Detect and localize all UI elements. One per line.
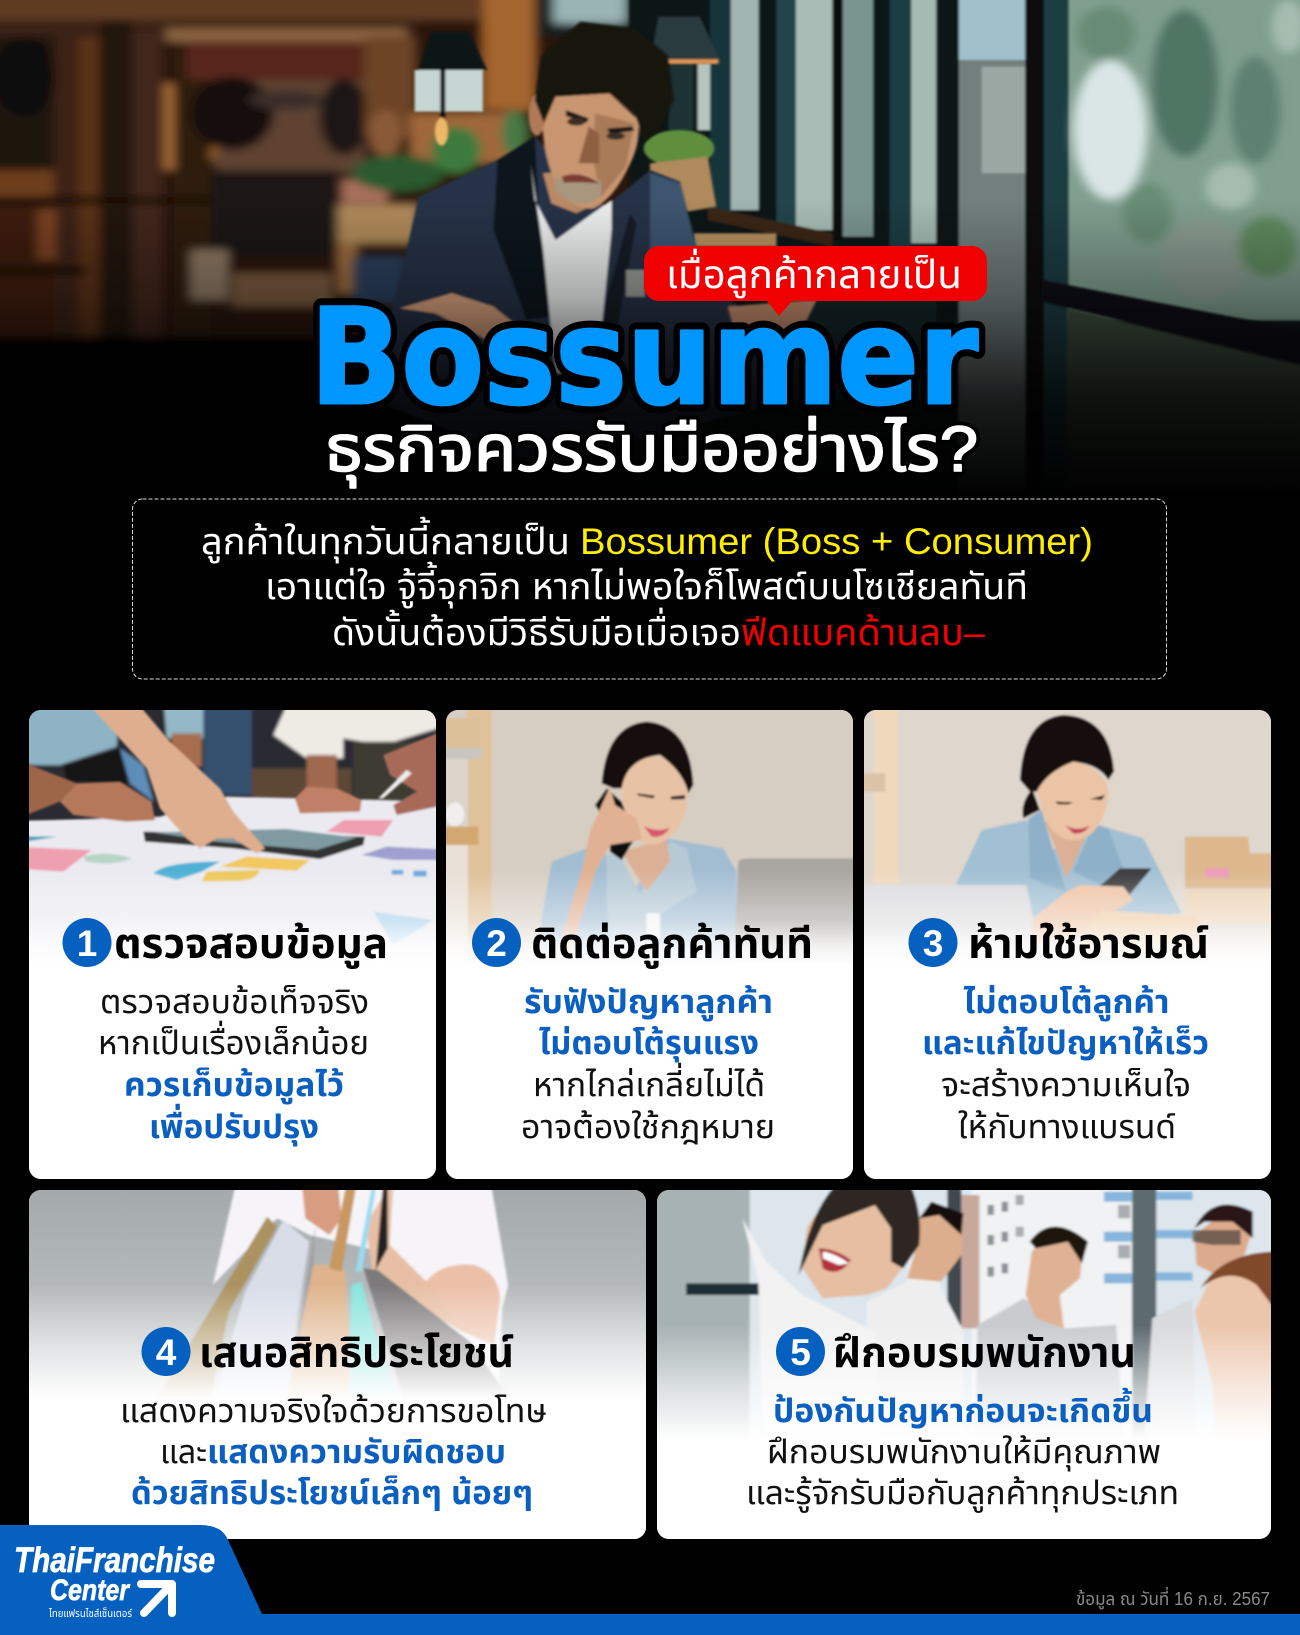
icon: arrow	[141, 1584, 172, 1613]
body text 1: เพื่อปรับปรุง	[149, 1103, 319, 1147]
intro text box: Bossumer (Boss + Consumer)	[580, 521, 1093, 562]
body text 3: ให้กับทางแบรนด์	[958, 1108, 1176, 1145]
photo: shopping bags	[29, 1190, 646, 1394]
heading 1: ตรวจสอบข้อมูล	[114, 920, 388, 969]
photo: smiling team	[657, 1190, 1271, 1434]
callout: red speech bubble	[644, 246, 987, 316]
number badge 2: 2	[486, 923, 507, 964]
body text 3: จะสร้างความเห็นใจ	[941, 1066, 1191, 1103]
body text 4	[120, 1392, 547, 1511]
body text 1: ตรวจสอบข้อเท็จจริง	[100, 983, 369, 1020]
body text 1	[98, 983, 369, 1147]
body text 4: ด้วยสิทธิประโยชน์เล็กๆ น้อยๆ	[131, 1474, 533, 1511]
body text 3	[922, 983, 1209, 1145]
title: Bossumer: Bossumer	[310, 281, 978, 435]
heading 2: ติดต่อลูกค้าทันที	[531, 920, 813, 969]
panel: step 3 no emotion	[864, 710, 1271, 1179]
subtitle: ธุรกิจควรรับมืออย่างไร?	[325, 413, 978, 488]
body text 2: รับฟังปัญหาลูกค้า	[524, 983, 773, 1022]
date note: ข้อมูล ณ วันที่ 16 ก.ย. 2567	[1076, 1586, 1270, 1611]
footer band	[0, 1614, 1300, 1635]
logo: ThaiFranchise Center	[0, 1525, 262, 1635]
body text 2	[521, 983, 775, 1145]
body text 5: ฝึกอบรมพนักงานให้มีคุณภาพ	[767, 1433, 1161, 1472]
businessman figure	[373, 22, 817, 467]
body text 5	[746, 1387, 1179, 1513]
body text 1: หากเป็นเรื่องเล็กน้อย	[98, 1020, 369, 1061]
logo: ThaiFranchise Center: ไทยแฟรนไชส์เซ็นเตอร์	[48, 1608, 132, 1620]
panel: step 1 check the data	[29, 710, 436, 1179]
title: Bossumer: Bossumer	[310, 281, 978, 435]
number badge 1: 1	[77, 923, 97, 964]
number badge 1	[62, 918, 112, 967]
heading 3: ห้ามใช้อารมณ์	[968, 920, 1209, 967]
number badge 2	[472, 918, 521, 967]
intro text box: เอาแต่ใจ จู้จี้จุกจิก หากไม่พอใจก็โพสต์บนโซเชียลทันที	[265, 561, 1028, 609]
photo: team pointing at tablet	[29, 710, 436, 944]
body text 4: แสดงความจริงใจด้วยการขอโทษ	[120, 1392, 547, 1429]
number badge 5: 5	[790, 1332, 811, 1373]
body text 4: แสดงความรับผิดชอบ	[207, 1433, 506, 1470]
callout: red speech bubble: เมื่อลูกค้ากลายเป็น	[666, 248, 962, 298]
body text 2: อาจต้องใช้กฎหมาย	[521, 1108, 775, 1145]
number badge 5	[776, 1327, 825, 1376]
body text 5: ป้องกันปัญหาก่อนจะเกิดขึ้น	[773, 1387, 1153, 1429]
heading 5: ฝึกอบรมพนักงาน	[833, 1329, 1136, 1376]
hero photo: frustrated businessman in cafe	[0, 0, 1300, 520]
number badge 4	[142, 1327, 190, 1376]
body text 2: หากไกล่เกลี่ยไม่ได้	[533, 1062, 765, 1103]
logo: ThaiFranchise Center: Center	[50, 1574, 131, 1607]
heading 4: เสนอสิทธิประโยชน์	[199, 1329, 514, 1376]
panel: step 5 train staff	[642, 1178, 1289, 1539]
intro text box: ลูกค้าในทุกวันนี้กลายเป็น	[201, 516, 570, 564]
intro text box: ฟีดแบคด้านลบ–	[741, 612, 985, 653]
body text 3: ไม่ตอบโต้ลูกค้า	[964, 983, 1170, 1022]
intro text box	[132, 499, 1166, 679]
body text 2: ไม่ตอบโต้รุนแรง	[539, 1024, 759, 1063]
subtitle: ธุรกิจควรรับมืออย่างไร?	[325, 413, 978, 488]
photo: woman looking at smartphone	[864, 710, 1271, 954]
intro text box: ดังนั้นต้องมีวิธีรับมือเมื่อเจอ	[332, 607, 741, 653]
number badge 4: 4	[156, 1332, 177, 1373]
body text 3: และแก้ไขปัญหาให้เร็ว	[922, 1024, 1209, 1061]
body text 4: และ	[160, 1433, 207, 1470]
panel: step 4 offer benefits	[20, 1178, 650, 1539]
logo: ThaiFranchise Center: ThaiFranchise	[14, 1541, 215, 1580]
panel: step 2 contact customer	[446, 710, 853, 1179]
body text 5: และรู้จักรับมือกับลูกค้าทุกประเภท	[746, 1474, 1179, 1513]
body text 1: ควรเก็บข้อมูลไว้	[124, 1066, 344, 1105]
number badge 3	[908, 918, 958, 967]
photo: woman on the phone	[446, 710, 853, 956]
number badge 3: 3	[923, 923, 943, 964]
